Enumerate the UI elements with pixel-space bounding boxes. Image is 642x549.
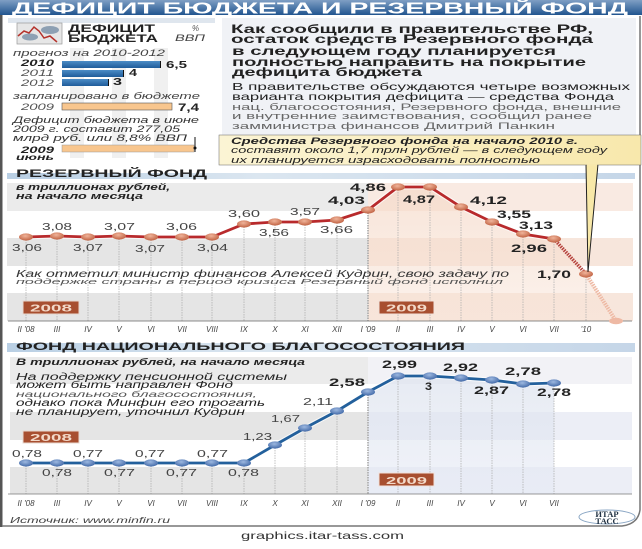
heading: deficit: БЮДЖЕТА xyxy=(68,33,158,45)
badge 2008: 2008 xyxy=(30,433,73,444)
lead text: в следующем году планируется xyxy=(232,46,556,58)
unit label: ВВП xyxy=(175,33,206,43)
axis labels xyxy=(17,499,560,508)
value labels: 0,77 xyxy=(73,449,104,460)
annotation: Kudrin: Как отметил министр финансов Алексей Кудрин, свою задачу по xyxy=(16,268,510,280)
body text: нац. благосостояния, Резервного фонда, внешние xyxy=(232,102,621,113)
logo: ITAR-TASS: ТАСС xyxy=(595,516,619,526)
value labels: 2,78 xyxy=(537,387,571,399)
axis labels: IX xyxy=(240,499,248,508)
forecast bars xyxy=(13,48,188,88)
value labels: 2,99 xyxy=(382,359,417,371)
value labels: 3,60 xyxy=(228,209,261,220)
planned bar: 2009 xyxy=(19,102,54,112)
logo: ITAR-TASS: ИТАР xyxy=(595,509,619,519)
annotation: pension system: может быть направлен Фонд xyxy=(16,379,234,391)
wealth fund line xyxy=(26,376,554,463)
value labels xyxy=(12,359,571,479)
value labels: 3,07 xyxy=(73,243,104,254)
chart: national wealth fund xyxy=(8,357,632,508)
area under 2009 line xyxy=(368,187,616,321)
value labels: 2,11 xyxy=(303,397,334,408)
actual deficit note and bar: июнь xyxy=(16,153,54,162)
annotation: Kudrin: поддержке страны в период кризиса Резервный фонд исполнил xyxy=(16,277,505,286)
annotation: pension system xyxy=(16,372,288,418)
title bar xyxy=(0,0,642,18)
forecast bars: 4 xyxy=(129,68,138,79)
axis labels: III xyxy=(54,325,61,334)
axis labels: II '08 xyxy=(17,499,35,508)
area under 2009 line xyxy=(368,376,554,494)
actual deficit note and bar xyxy=(11,115,199,162)
axis labels: VII xyxy=(177,499,188,508)
value labels: 0,77 xyxy=(104,468,136,479)
panel: government statement xyxy=(222,18,636,136)
axis labels: V xyxy=(489,325,495,334)
forecast bars: 3 xyxy=(113,77,123,88)
section header: reserve fund xyxy=(7,167,635,180)
axis labels: IV xyxy=(457,499,465,508)
annotation: Kudrin xyxy=(16,268,510,286)
value labels: 0,78 xyxy=(228,468,260,479)
callout: reserve fund 2010 xyxy=(219,135,641,272)
callout: reserve fund 2010: составят около 1,7 трлн рублей — в следующем году xyxy=(231,145,608,155)
value labels: 3,06 xyxy=(12,243,43,254)
body text: варианта покрытия дефицита — средства Фонда xyxy=(232,91,614,103)
axis labels: VII xyxy=(549,499,560,508)
planned bar: запланировано в бюджете xyxy=(11,91,200,101)
lead text: полностью направить на покрытие xyxy=(232,57,586,69)
panel: budget deficit xyxy=(7,18,215,165)
section header: reserve fund: РЕЗЕРВНЫЙ ФОНД xyxy=(16,167,207,180)
annotation: pension system: однако пока Минфин его трогать xyxy=(16,397,265,409)
actual deficit note and bar: 2009 xyxy=(19,145,55,156)
value labels: 1,70 xyxy=(537,269,571,281)
value labels: 3,04 xyxy=(197,243,229,254)
actual deficit note and bar: Дефицит бюджета в июне xyxy=(11,115,199,125)
value labels: 3,55 xyxy=(497,209,531,221)
planned bar xyxy=(11,91,200,114)
axis labels: V xyxy=(489,499,495,508)
value labels: 1,67 xyxy=(271,414,301,425)
annotation: pension system: На поддержку пенсионной системы xyxy=(16,372,288,383)
axis labels: III xyxy=(427,325,434,334)
value labels xyxy=(12,182,571,281)
value labels: 0,78 xyxy=(12,449,43,460)
value labels: 0,78 xyxy=(42,468,73,479)
chart unit note xyxy=(16,182,170,201)
value labels: 3,57 xyxy=(290,207,321,218)
lead text: дефицита бюджета xyxy=(232,67,423,79)
value labels: 1,23 xyxy=(243,432,273,443)
axis labels: I '09 xyxy=(361,499,376,508)
title bar: ДЕФИЦИТ БЮДЖЕТА И РЕЗЕРВНЫЙ ФОНД xyxy=(12,0,629,18)
logo: ITAR-TASS xyxy=(579,509,635,526)
body text: замминистра финансов Дмитрий Панкин xyxy=(232,121,555,132)
forecast bars: 6,5 xyxy=(166,60,188,71)
lead text: Как сообщили в правительстве РФ, xyxy=(231,24,593,36)
axis labels: VI xyxy=(519,499,528,508)
value labels: 3,66 xyxy=(320,225,354,236)
badge 2009 xyxy=(379,301,434,314)
axis labels: X xyxy=(271,325,278,334)
value labels: 3,56 xyxy=(259,228,290,239)
source: Источник: www.minfin.ru xyxy=(10,515,170,525)
axis labels: VII xyxy=(177,325,188,334)
axis labels: II xyxy=(396,325,401,334)
badge 2009 xyxy=(379,473,434,487)
callout: reserve fund 2010: их планируется израсходовать полностью xyxy=(231,155,540,165)
value labels: 2,92 xyxy=(443,362,478,374)
value labels: 4,12 xyxy=(470,195,507,207)
chart unit note: В триллионах рублей, на начало месяца xyxy=(16,357,305,367)
axis labels: VII xyxy=(549,325,560,334)
value labels: 3,07 xyxy=(135,244,166,255)
actual deficit note and bar: 2009 г. составит 277,05 xyxy=(11,124,182,134)
forecast bars: 2011 xyxy=(19,68,54,78)
chart: reserve fund xyxy=(7,182,633,334)
axis labels: VIII xyxy=(206,499,219,508)
section header: national wealth fund: ФОНД НАЦИОНАЛЬНОГО БЛАГОСОСТОЯНИЯ xyxy=(16,341,465,353)
axis labels: IV xyxy=(84,499,92,508)
badge 2009: 2009 xyxy=(386,476,428,487)
value labels: 2,78 xyxy=(505,366,541,378)
axis labels: VIII xyxy=(206,325,219,334)
axis labels: VI xyxy=(519,325,528,334)
axis labels: '10 xyxy=(581,325,592,334)
body text: и внутренние заимствования, сообщил ранее xyxy=(232,111,592,122)
axis labels: IV xyxy=(84,325,92,334)
icon: deficit chart xyxy=(17,23,62,44)
unit label: % xyxy=(192,24,199,33)
value labels: 0,77 xyxy=(166,468,198,479)
value labels: 3 xyxy=(425,381,432,393)
reserve fund line xyxy=(26,187,554,239)
axis labels: III xyxy=(54,499,61,508)
value labels: 4,87 xyxy=(403,194,435,206)
value labels: 0,77 xyxy=(135,449,166,460)
value labels: 4,03 xyxy=(328,195,365,207)
axis labels: V xyxy=(116,499,122,508)
forecast bars: 2012 xyxy=(19,78,54,88)
axis labels: VI xyxy=(147,499,156,508)
badge 2008 xyxy=(23,301,79,314)
value labels: 3,13 xyxy=(519,220,553,232)
axis labels: XII xyxy=(331,325,343,334)
value labels: 2,58 xyxy=(329,377,365,389)
actual deficit note and bar: млрд руб. или 8,8% ВВП xyxy=(13,133,188,143)
badge 2008 xyxy=(23,431,79,444)
footer url: graphics.itar-tass.com xyxy=(241,530,404,542)
body text xyxy=(232,81,631,132)
axis labels: II xyxy=(396,499,401,508)
value labels: 3,08 xyxy=(42,222,73,233)
annotation: pension system: не планирует, уточнил Кудрин xyxy=(16,407,246,418)
lead text: остаток средств Резервного фонда xyxy=(231,34,594,46)
value labels: 0,77 xyxy=(197,449,229,460)
heading: deficit xyxy=(68,23,158,45)
axis labels: V xyxy=(116,325,122,334)
axis labels: II '08 xyxy=(17,325,35,334)
value labels: 4,86 xyxy=(350,182,386,194)
unit label xyxy=(175,24,206,43)
forecast bars: 2010 xyxy=(19,58,55,69)
axis labels: XI xyxy=(300,325,310,334)
badge 2009: 2009 xyxy=(386,304,428,314)
axis labels: III xyxy=(427,499,434,508)
axis labels: VI xyxy=(147,325,156,334)
value labels: 3,07 xyxy=(104,222,136,233)
heading: deficit: ДЕФИЦИТ xyxy=(68,23,155,35)
value labels: 2,96 xyxy=(511,243,547,255)
section header: national wealth fund xyxy=(7,341,635,353)
chart unit note: на начало месяца xyxy=(16,191,143,201)
axis labels: XII xyxy=(331,499,343,508)
lead text xyxy=(231,24,594,79)
body text: В правительстве обсуждаются четыре возможных xyxy=(232,81,631,93)
axis labels xyxy=(17,325,592,334)
value labels: 3,06 xyxy=(166,222,198,233)
axis labels: I '09 xyxy=(361,325,376,334)
axis labels: IV xyxy=(457,325,465,334)
value labels: 2,87 xyxy=(474,385,509,397)
badge 2008: 2008 xyxy=(30,304,73,314)
callout: reserve fund 2010: Средства Резервного фонда на начало 2010 г. xyxy=(231,136,578,147)
axis labels: XI xyxy=(300,499,310,508)
axis labels: IX xyxy=(240,325,248,334)
planned bar: 7,4 xyxy=(178,102,200,114)
annotation: pension system: национального благосостояния, xyxy=(16,390,257,399)
chart unit note: в триллионах рублей, xyxy=(16,182,170,192)
axis labels: X xyxy=(271,499,278,508)
forecast bars: прогноз на 2010-2012 xyxy=(13,48,165,58)
